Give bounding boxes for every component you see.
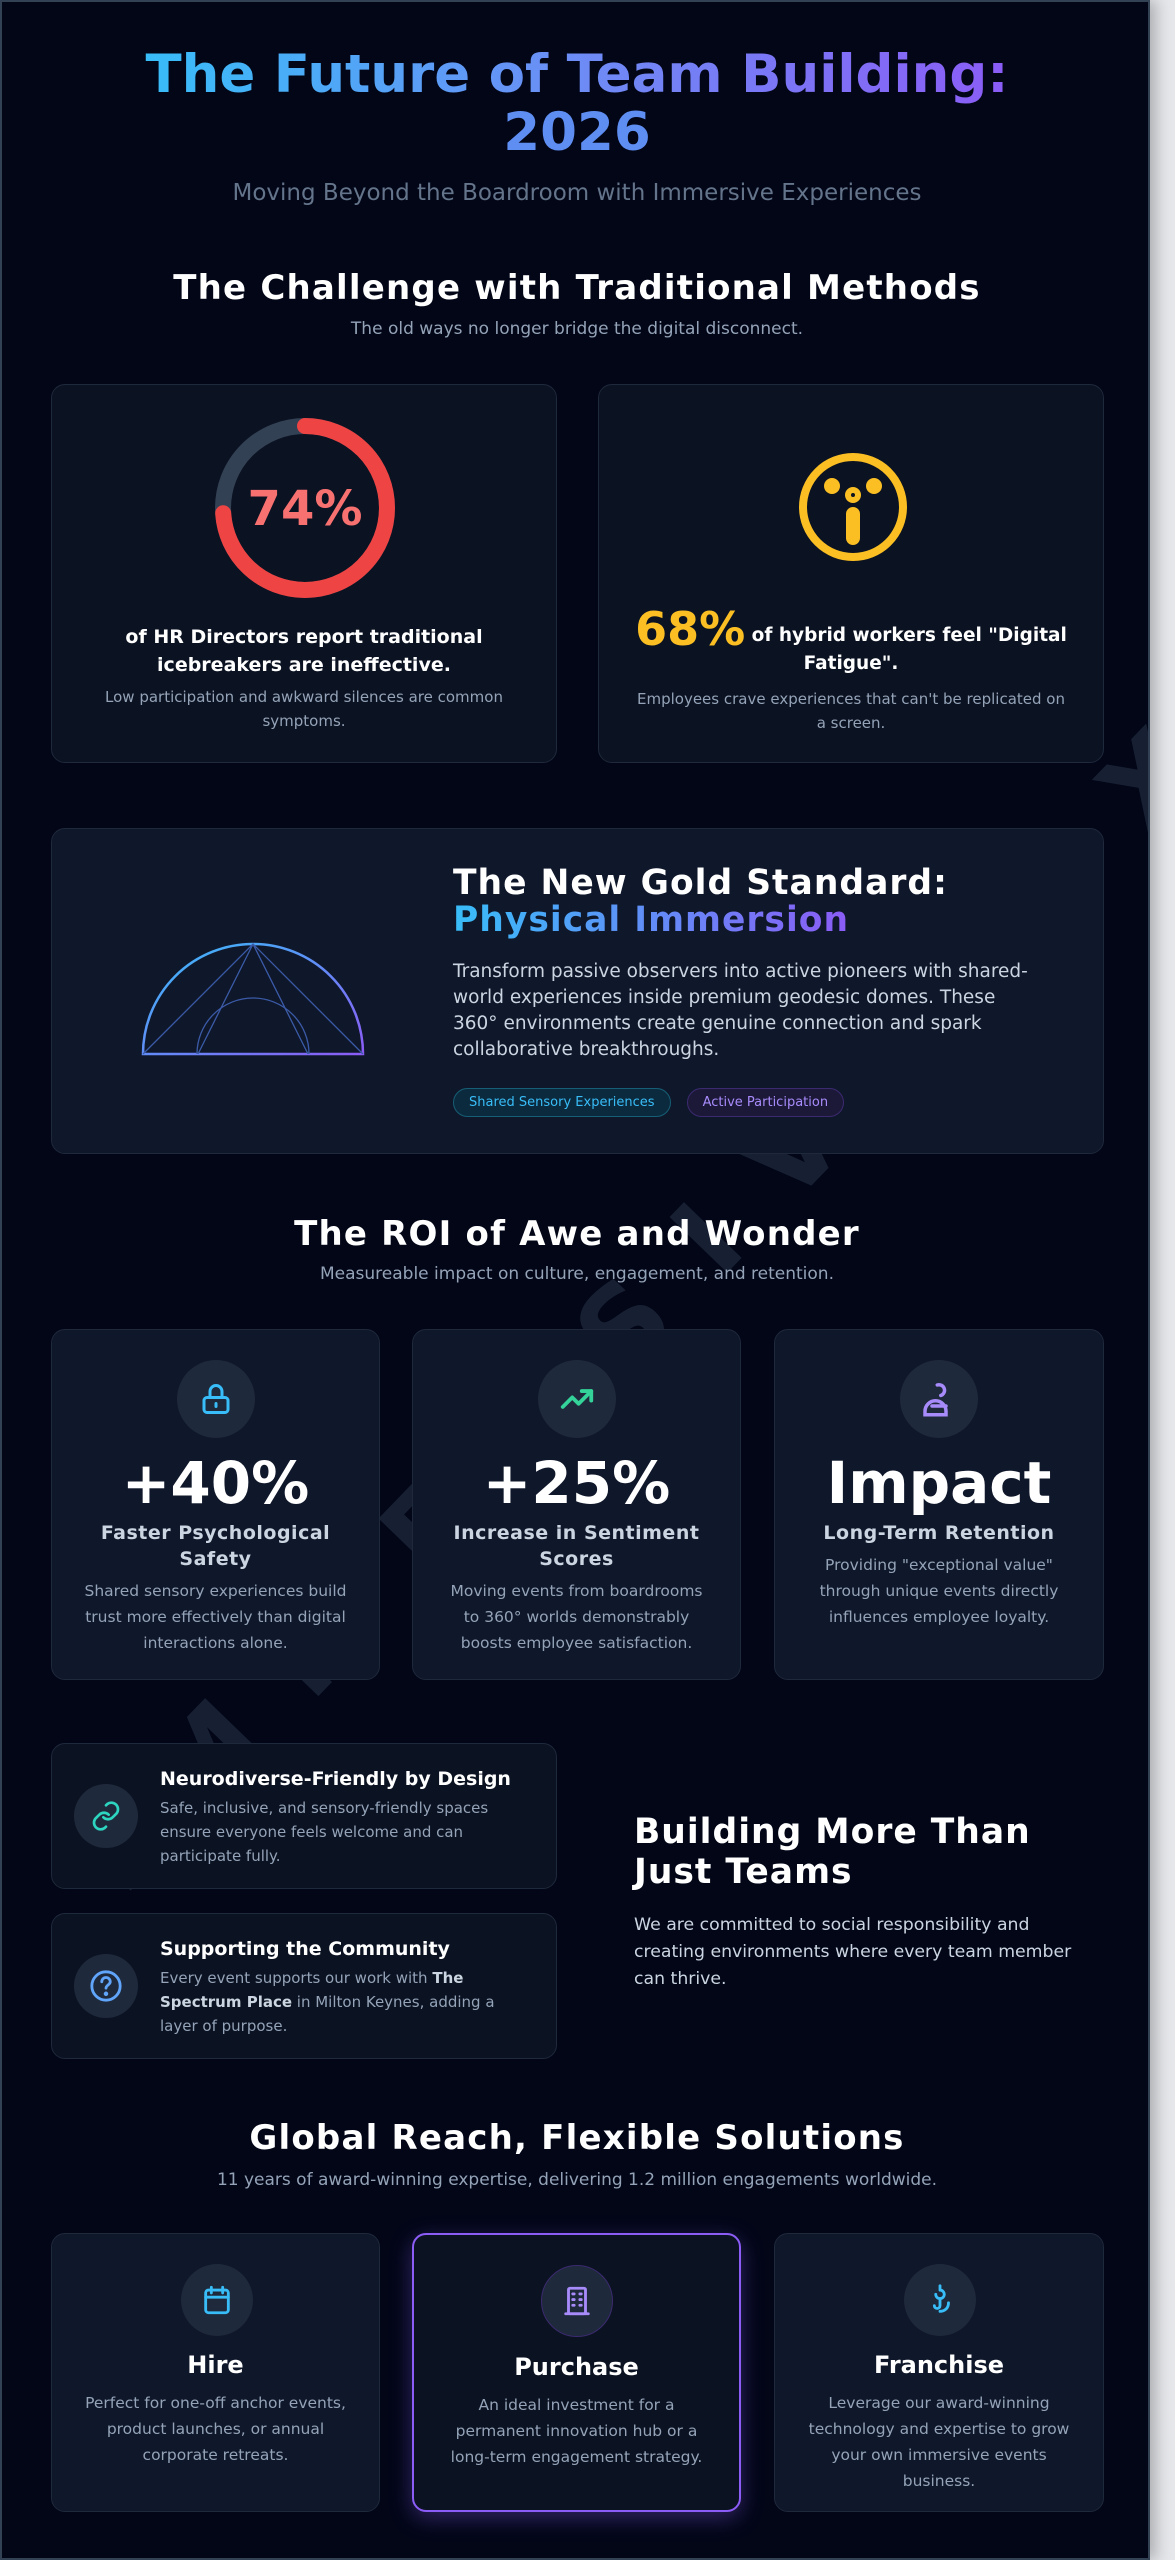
icon: fatigue	[799, 453, 907, 561]
icon: lock	[177, 1360, 255, 1438]
panel: hire: Perfect for one-off anchor events, product launches, or annual corporate retreats.	[85, 2394, 346, 2464]
tags: Shared Sensory Experiences	[469, 1095, 655, 1110]
icon: building	[541, 2265, 613, 2337]
title: The Future of Team Building:	[145, 44, 1009, 105]
panel: impact: Impact	[827, 1449, 1051, 1517]
heading: ROI: The ROI of Awe and Wonder	[294, 1214, 860, 1254]
stat detail: Low participation and awkward silences are common symptoms.	[105, 688, 503, 730]
subheading: challenge: The old ways no longer bridge the digital disconnect.	[351, 319, 803, 339]
panel: 68% stat	[598, 384, 1104, 763]
donut chart	[215, 418, 395, 598]
subheading: ROI: Measureable impact on culture, engagement, and retention.	[320, 1264, 834, 1284]
panel: +40%: Faster Psychological Safety	[101, 1522, 330, 1570]
panel: neurodiverse: Neurodiverse-Friendly by Design	[160, 1768, 511, 1790]
stat detail: Employees crave experiences that can't be replicated on a screen.	[637, 690, 1065, 732]
icon: link	[74, 1784, 138, 1848]
panel: purchase: Purchase	[514, 2353, 639, 2381]
icon: hook	[904, 2264, 976, 2336]
panel: purchase: An ideal investment for a permanent innovation hub or a long-term engagement strategy.	[451, 2396, 702, 2466]
panel: +25%: Moving events from boardrooms to 360° worlds demonstrably boosts employee satisfaction.	[450, 1582, 702, 1652]
panel: purchase	[412, 2233, 741, 2512]
heading: Physical Immersion	[453, 900, 849, 940]
panel: franchise	[774, 2233, 1104, 2512]
panel: hire: Hire	[187, 2351, 244, 2379]
icon: person	[900, 1360, 978, 1438]
panel: neurodiverse	[51, 1743, 557, 1889]
subheading: global: 11 years of award-winning expertise, delivering 1.2 million engagements worldwide.	[217, 2170, 937, 2190]
panel: community: Supporting the Community	[160, 1938, 450, 1960]
panel: impact: Providing "exceptional value" through unique events directly influences employee loyalty.	[820, 1556, 1058, 1626]
heading	[453, 863, 948, 940]
body text: Transform passive observers into active pioneers with shared-world experiences inside premium geodesic domes. These 360° environments create genuine connection and spark collaborative breakthroughs.	[453, 961, 1028, 1060]
title	[145, 44, 1009, 163]
tags: Active Participation	[703, 1095, 828, 1110]
title: 2026	[503, 102, 651, 163]
panel: +40%: Shared sensory experiences build trust more effectively than digital interactions alone.	[84, 1582, 346, 1652]
panel: community	[51, 1913, 557, 2059]
donut chart: 74%	[248, 481, 362, 537]
icon: help	[74, 1954, 138, 2018]
panel: +40%: +40%	[122, 1449, 309, 1517]
panel: +25%	[412, 1329, 741, 1680]
text block: building more than teams: We are committed to social responsibility and creating environments where every team member can thrive.	[634, 1915, 1071, 1989]
text block: building more than teams	[632, 1812, 1072, 1989]
icon: dome	[142, 942, 364, 1056]
panel: +25%: +25%	[483, 1449, 670, 1517]
subtitle: Moving Beyond the Boardroom with Immersive Experiences	[233, 180, 921, 206]
heading: global: Global Reach, Flexible Solutions	[249, 2118, 905, 2158]
icon: trend	[538, 1360, 616, 1438]
stat text: 68% of hybrid workers feel "Digital Fatigue".	[635, 602, 1067, 674]
panel: impact: Long-Term Retention	[823, 1522, 1055, 1544]
panel: community: Every event supports our work with The Spectrum Place in Milton Keynes, adding a layer of purpose.	[160, 1969, 495, 2035]
icon: calendar	[181, 2264, 253, 2336]
panel: franchise: Leverage our award-winning technology and expertise to grow your own immersive events business.	[809, 2394, 1069, 2490]
panel: gold standard	[51, 828, 1104, 1154]
panel: hire	[51, 2233, 380, 2512]
panel: +40%	[51, 1329, 380, 1680]
panel: +25%: Increase in Sentiment Scores	[454, 1522, 699, 1570]
heading: challenge: The Challenge with Traditional Methods	[173, 268, 981, 308]
stat text: of HR Directors report traditional icebreakers are ineffective.	[125, 626, 483, 676]
panel: franchise: Franchise	[874, 2351, 1004, 2379]
panel: impact	[774, 1329, 1104, 1680]
panel: 74% stat	[51, 384, 557, 763]
text block: building more than teams: Building More Than Just Teams	[634, 1812, 1031, 1892]
panel: neurodiverse: Safe, inclusive, and sensory-friendly spaces ensure everyone feels welcome and can participate fully.	[160, 1799, 488, 1865]
heading: The New Gold Standard:	[453, 863, 948, 903]
tags	[453, 1088, 844, 1117]
